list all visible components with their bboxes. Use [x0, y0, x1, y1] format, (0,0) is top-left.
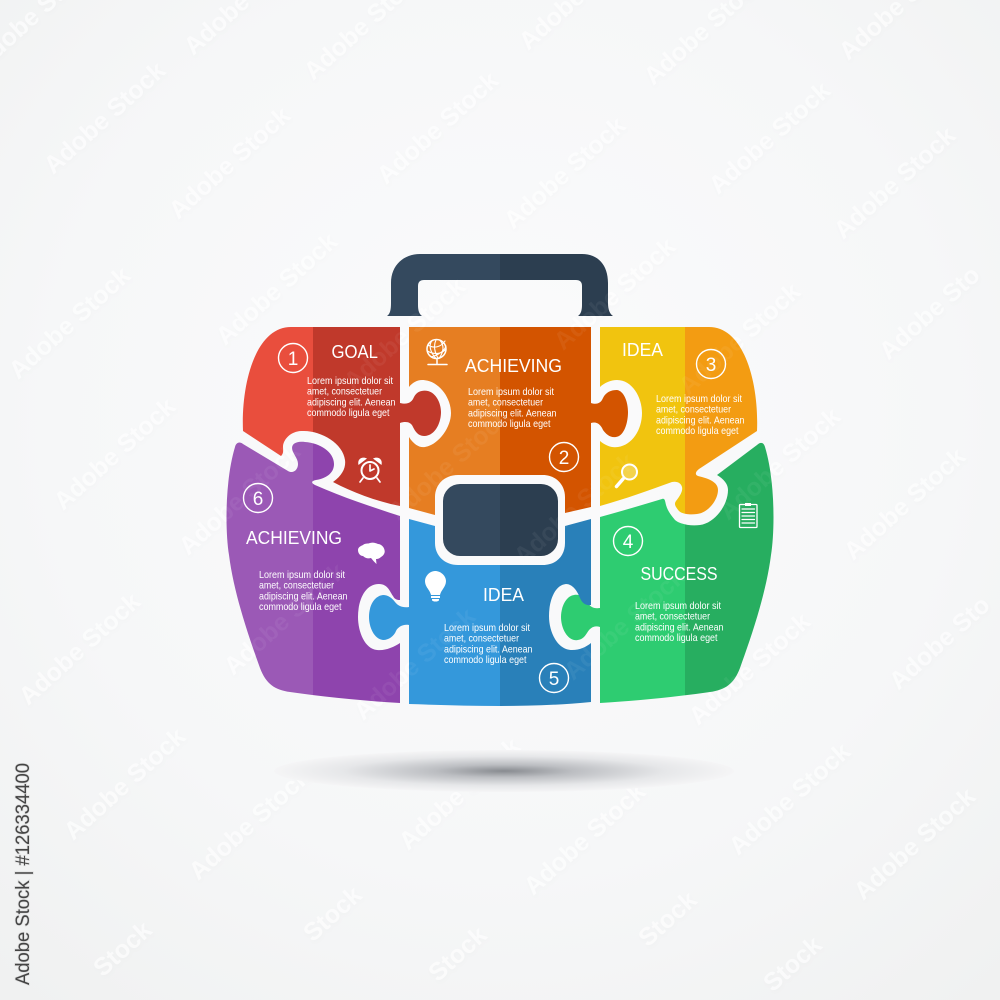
faint watermark over briefcase: Adobe Stock: [674, 277, 806, 401]
icon: alarm clock: [358, 458, 382, 482]
watermark pattern: Adobe Stock: [211, 227, 343, 351]
number 2: [550, 442, 578, 472]
watermark pattern: Adobe Sto: [874, 261, 985, 365]
faint watermark over briefcase: Adobe Stock: [509, 447, 641, 571]
watermark pattern: Adobe Stock: [684, 607, 816, 731]
heading: idea: IDEA: [622, 339, 664, 360]
text block: adipiscing elit. Aenean: [259, 590, 348, 602]
watermark pattern: Adobe Stock: [49, 392, 181, 516]
text block: amet, consectetuer: [635, 611, 710, 623]
text block: commodo ligula eget: [468, 418, 551, 430]
text block: Lorem ipsum dolor sit: [635, 600, 721, 612]
text block: [307, 375, 396, 419]
number 2: 2: [559, 448, 569, 469]
text block: adipiscing elit. Aenean: [635, 621, 724, 633]
icon: light bulb: [425, 571, 446, 602]
faint watermark over briefcase: Adobe Stock: [174, 437, 306, 561]
watermark pattern: Adobe Stock: [164, 101, 296, 225]
watermark pattern: Adobe Sto: [884, 591, 995, 695]
text block: amet, consectetuer: [468, 397, 543, 409]
text block: Lorem ipsum dolor sit: [444, 622, 530, 634]
watermark pattern: Adobe Stock: [714, 402, 846, 526]
text block: Lorem ipsum dolor sit: [307, 375, 393, 387]
icon: magnifier: [616, 464, 637, 486]
watermark pattern: Stock: [88, 916, 157, 982]
briefcase handle: [387, 254, 613, 316]
faint watermark over briefcase: Adobe Stock: [384, 402, 516, 526]
number 6: 6: [253, 489, 263, 510]
number 5: 5: [549, 669, 559, 690]
watermark pattern: Adobe Stock: [39, 56, 171, 180]
watermark pattern: Adobe Stock: [849, 782, 981, 906]
text block: [468, 386, 557, 430]
watermark pattern: Adobe Stock: [549, 232, 681, 356]
watermark pattern: Adobe Stock: [674, 277, 806, 401]
red puzzle piece: [243, 327, 441, 506]
watermark pattern: Stock: [298, 881, 367, 947]
text block: adipiscing elit. Aenean: [307, 396, 396, 408]
watermark pattern: Adobe Stock: [184, 762, 316, 886]
text block: [259, 569, 348, 613]
panel: 5 idea (blue): [369, 519, 591, 706]
text block: commodo ligula eget: [259, 601, 342, 613]
text block: commodo ligula eget: [444, 654, 527, 666]
heading: achieving: ACHIEVING: [246, 527, 342, 548]
heading: goal: GOAL: [332, 341, 378, 362]
watermark pattern: Adobe Stock: [339, 272, 471, 396]
text block: [444, 622, 533, 666]
number 4: [614, 526, 642, 556]
number 6: [244, 484, 272, 512]
heading: idea: IDEA: [483, 584, 525, 605]
text block: commodo ligula eget: [635, 632, 718, 644]
panel: 2 achieving (orange): [409, 327, 628, 515]
number 4: 4: [623, 532, 634, 553]
purple puzzle piece: [227, 442, 400, 703]
text block: [635, 600, 724, 644]
number 1: [278, 344, 308, 372]
faint watermark over briefcase: Adobe Stock: [549, 232, 681, 356]
watermark pattern: Adobe Stock: [724, 737, 856, 861]
orange puzzle piece: [409, 327, 628, 515]
blue puzzle piece: [369, 519, 591, 706]
watermark pattern: Adobe Stock: [704, 76, 836, 200]
yellow puzzle piece: [600, 327, 757, 514]
watermark pattern: Adobe Stock: [349, 602, 481, 726]
faint watermark over briefcase: Adobe Stock: [714, 402, 846, 526]
icon: globe: [427, 340, 447, 364]
text block: adipiscing elit. Aenean: [444, 643, 533, 655]
watermark pattern: Adobe Stock: [59, 722, 191, 846]
heading: achieving: ACHIEVING: [465, 355, 562, 376]
icon: clipboard: [740, 503, 757, 528]
number 3: 3: [706, 355, 716, 376]
watermark pattern: Adobe Stock: [829, 121, 961, 245]
text block: adipiscing elit. Aenean: [468, 407, 557, 419]
panel: 1 goal (red): [243, 327, 441, 506]
text block: amet, consectetuer: [444, 633, 519, 645]
briefcase clasp: [443, 484, 558, 556]
faint watermark over briefcase: Adobe Stock: [349, 602, 481, 726]
watermark pattern: Adobe Stock: [372, 66, 504, 190]
stock id label: Adobe Stock | #126334400: [12, 763, 34, 985]
text block: commodo ligula eget: [307, 407, 390, 419]
faint watermark over briefcase: Adobe Stock: [219, 557, 351, 681]
watermark pattern: Stock: [633, 886, 702, 952]
text block: Lorem ipsum dolor sit: [259, 569, 345, 581]
text block: amet, consectetuer: [259, 580, 334, 592]
heading: success: SUCCESS: [640, 563, 718, 584]
text block: adipiscing elit. Aenean: [656, 414, 745, 426]
watermark pattern: Adobe Stock: [4, 261, 136, 385]
faint watermark over briefcase: Adobe Stock: [339, 272, 471, 396]
text block: amet, consectetuer: [656, 404, 731, 416]
watermark pattern: Adobe Stock: [174, 437, 306, 561]
icon: brain: [358, 543, 385, 564]
watermark pattern: Adobe Stock: [839, 442, 971, 566]
text block: amet, consectetuer: [307, 386, 382, 398]
watermark pattern: Adobe Stock: [499, 111, 631, 235]
watermark pattern: Adobe Stock: [219, 557, 351, 681]
faint watermark over briefcase: Adobe Stock: [211, 227, 343, 351]
text block: [656, 393, 745, 437]
watermark pattern: Adobe Stock: [14, 587, 146, 711]
panel: 4 success (green): [561, 443, 773, 703]
number 3: [696, 350, 726, 378]
watermark pattern: Stock: [423, 921, 492, 987]
number 5: [540, 664, 568, 692]
watermark pattern: Stock: [758, 931, 827, 997]
panel: 3 idea (yellow): [600, 327, 757, 514]
watermark pattern: Adobe Stock: [394, 732, 526, 856]
number 1: 1: [288, 349, 298, 370]
text block: commodo ligula eget: [656, 425, 739, 437]
faint watermark over briefcase: [174, 227, 846, 731]
faint watermark over briefcase: Adobe Stock: [559, 562, 691, 686]
text block: Lorem ipsum dolor sit: [468, 386, 554, 398]
watermark pattern: Adobe Stock: [519, 777, 651, 901]
panel: 6 achieving (purple): [227, 442, 400, 703]
green puzzle piece: [561, 443, 773, 703]
ground shadow: [274, 750, 734, 792]
faint watermark over briefcase: Adobe Stock: [684, 607, 816, 731]
text block: Lorem ipsum dolor sit: [656, 393, 742, 405]
